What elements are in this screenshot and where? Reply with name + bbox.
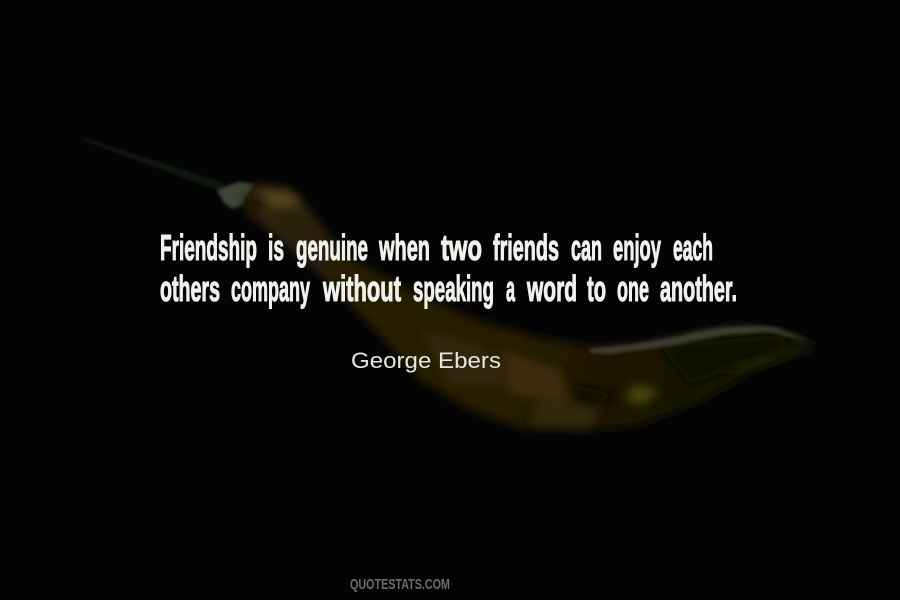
quote line 2: others — [160, 268, 220, 309]
quote line 2: speaking — [413, 268, 494, 309]
quote line 1: genuine — [296, 227, 368, 268]
banana body — [243, 184, 818, 431]
author: George Ebers — [351, 348, 501, 373]
banana photo — [80, 136, 818, 431]
quote line 1: enjoy — [613, 227, 661, 268]
quote line 1: when — [378, 227, 430, 268]
quote line 2: word — [526, 268, 577, 309]
quote line 1: friends — [493, 227, 559, 268]
quote line 2 — [160, 268, 737, 309]
quote line 1: Friendship — [160, 227, 257, 268]
banana stem — [80, 136, 225, 192]
quote line 1: is — [268, 227, 284, 268]
quote line 2: a — [506, 268, 515, 309]
banana stem tip — [217, 182, 254, 209]
watermark: QUOTESTATS.COM — [350, 576, 450, 593]
quote line 2: company — [231, 268, 310, 309]
quote line 1 — [160, 227, 713, 268]
quote line 2: to — [587, 268, 606, 309]
banana patches — [245, 190, 810, 428]
quote line 1: can — [571, 227, 602, 268]
quote line 2: one — [617, 268, 649, 309]
banana highlight — [590, 326, 812, 354]
quote line 2: another. — [660, 268, 737, 309]
quote: each — [673, 227, 713, 268]
quote line 1: two — [441, 227, 482, 268]
quote — [160, 227, 737, 309]
quote line 2: without — [322, 268, 401, 309]
